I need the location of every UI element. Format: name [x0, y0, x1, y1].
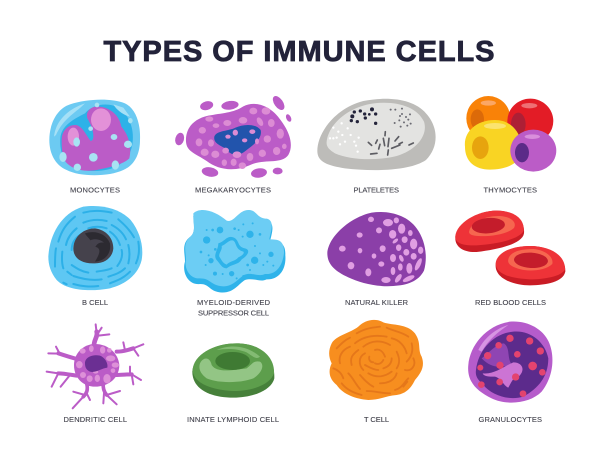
label: plateletes: PLATELETES [354, 186, 399, 194]
label: natural killer: NATURAL KILLER [345, 298, 409, 307]
cell: granulocytes [468, 322, 552, 403]
label: dendritic cell: DENDRITIC CELL [64, 415, 127, 424]
label: myeloid-derived suppressor cell: MYELOID-DERIVED [197, 298, 271, 307]
red blood cell: upper [455, 211, 524, 252]
cell: megakaryocyte [174, 94, 292, 179]
cell: monocyte [49, 100, 140, 175]
label: T cell: T CELL [364, 415, 389, 424]
cell: dendritic cell [47, 324, 143, 408]
label: granulocytes: GRANULOCYTES [478, 415, 542, 424]
label: thymocytes: THYMOCYTES [484, 186, 537, 194]
cell: myeloid-derived suppressor cell [184, 210, 285, 293]
cell: innate lymphoid cell [192, 343, 274, 398]
label: innate lymphoid cell: INNATE LYMPHOID CELL [187, 415, 279, 424]
cell: platelets [317, 99, 436, 170]
cell: red blood cells [455, 211, 565, 285]
label: monocytes: MONOCYTES [70, 186, 120, 194]
label: B cell: B CELL [82, 298, 108, 307]
label: myeloid-derived suppressor cell: SUPPRESSOR CELL [198, 308, 269, 318]
label: megakaryocytes: MEGAKARYOCYTES [195, 186, 271, 194]
cell: T cell [329, 320, 423, 400]
cell: thymocytes [465, 96, 556, 172]
cell: B cell [48, 206, 142, 290]
label: myeloid-derived suppressor cell [197, 298, 271, 318]
label: red blood cells: RED BLOOD CELLS [475, 298, 546, 307]
cell: natural killer [327, 212, 426, 286]
red blood cell: lower [496, 246, 565, 285]
title: TYPES OF IMMUNE CELLS [104, 36, 494, 68]
